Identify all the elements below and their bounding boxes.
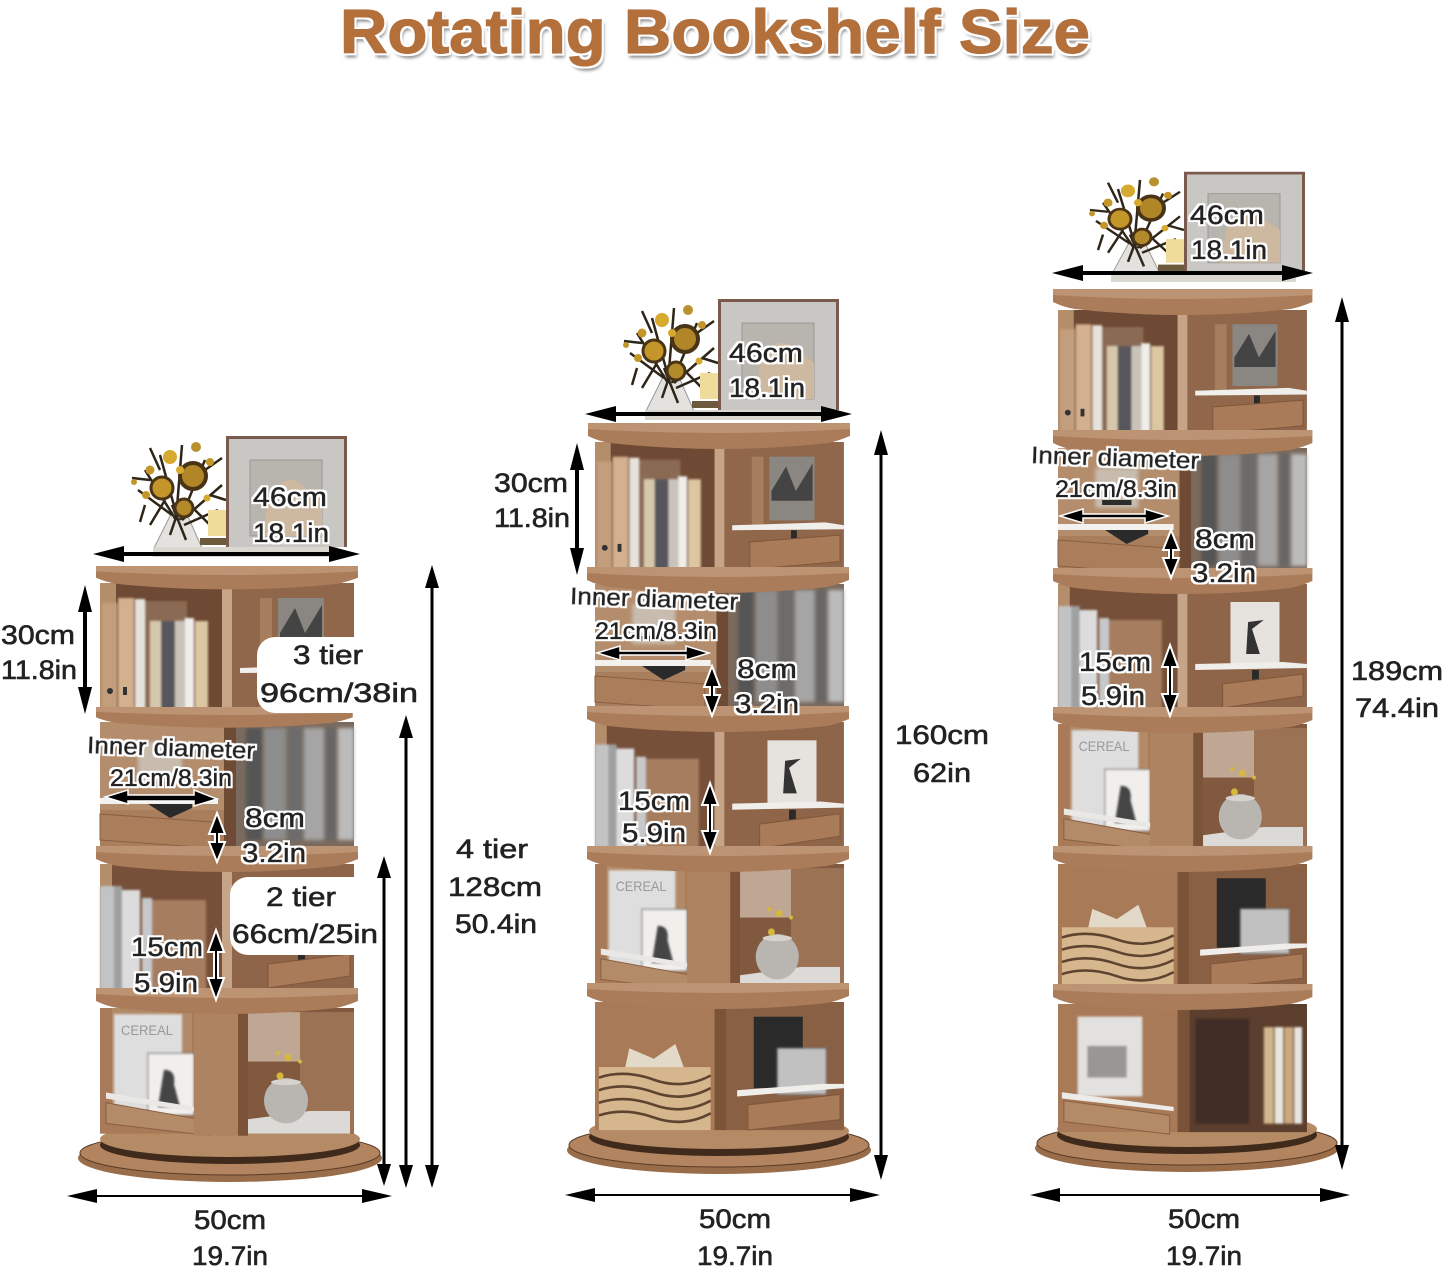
- shelf plate: [587, 983, 849, 1009]
- arrow: inner diameter shelf 3: [1060, 509, 1168, 523]
- bookshelf: 5 tier: [567, 299, 871, 1174]
- labels: 6 tier shelf: 189cm: [1351, 656, 1443, 686]
- arrow: 50cm shelf 2: [565, 1188, 880, 1202]
- arrow: 15cm shelf 3: [1162, 645, 1178, 716]
- arrow: 15cm shelf 1: [208, 930, 224, 1000]
- tier 2 of 5: [595, 584, 844, 712]
- tier 1 of 6: [1058, 310, 1307, 434]
- labels: 5 tier shelf: 160cm: [895, 720, 989, 750]
- labels: 6 tier shelf: 8cm: [1195, 524, 1255, 554]
- arrow: tier height shelf 1: [78, 585, 92, 714]
- top plate: [588, 423, 850, 449]
- arrow: inner diameter shelf 2: [597, 646, 709, 660]
- labels: 4 tier shelf: 15cm: [131, 932, 203, 962]
- shelf plate: [1053, 707, 1312, 733]
- callout: 3 tier: 3 tier: [293, 640, 363, 670]
- labels: 5 tier shelf: [494, 338, 989, 1269]
- arrow: top width shelf 3: [1052, 265, 1313, 281]
- arrow: inner diameter shelf 1: [105, 790, 217, 806]
- top decor: 5 tier: [623, 299, 839, 420]
- tier 2 of 4: [100, 722, 354, 850]
- labels: 5 tier shelf: Inner diameter: [570, 583, 738, 616]
- labels: 5 tier shelf: 18.1in: [729, 373, 805, 403]
- top plate: [1053, 289, 1312, 315]
- arrow: 3 tier height: [399, 715, 413, 1188]
- labels: 6 tier shelf: 15cm: [1079, 647, 1151, 677]
- shelf plate: [96, 707, 353, 728]
- arrow: 50cm shelf 3: [1030, 1188, 1350, 1202]
- shelf plate: [587, 567, 849, 593]
- labels: 5 tier shelf: 46cm: [729, 338, 803, 368]
- labels: 4 tier shelf: 128cm: [448, 872, 542, 902]
- callout: 3 tier: 96cm/38in: [260, 678, 418, 708]
- tier 1 of 5: [595, 442, 844, 569]
- top decor: 6 tier: [1089, 172, 1305, 282]
- labels: 6 tier shelf: 21cm/8.3in: [1055, 476, 1177, 503]
- top decor: 4 tier: [131, 436, 347, 557]
- title: Rotating Bookshelf Size: [342, 2, 1092, 71]
- labels: 5 tier shelf: 21cm/8.3in: [595, 618, 717, 645]
- arrow: 4 tier height: [425, 565, 439, 1188]
- labels: 4 tier shelf: [1, 482, 542, 1269]
- labels: 5 tier shelf: 8cm: [737, 654, 797, 684]
- labels: 4 tier shelf: 18.1in: [253, 518, 329, 548]
- tier 1 of 4: [100, 583, 354, 713]
- labels: 4 tier shelf: 50.4in: [455, 909, 537, 939]
- base: 6 tier: [1035, 1111, 1339, 1172]
- labels: 4 tier shelf: 46cm: [253, 482, 327, 512]
- title: Rotating Bookshelf Size: [340, 0, 1090, 67]
- arrow: total height shelf 2: [874, 430, 888, 1180]
- tier 3 of 5: [595, 722, 844, 851]
- labels: 5 tier shelf: 62in: [913, 758, 971, 788]
- shelf plate: [96, 846, 358, 872]
- labels: 5 tier shelf: 3.2in: [735, 689, 799, 719]
- labels: 6 tier shelf: 3.2in: [1192, 558, 1256, 588]
- labels: 4 tier shelf: Inner diameter: [87, 732, 255, 765]
- labels: 5 tier shelf: 5.9in: [622, 818, 686, 848]
- labels: 4 tier shelf: 3.2in: [242, 838, 306, 868]
- top plate: [96, 566, 358, 589]
- bookshelf: 6 tier: [1035, 172, 1339, 1172]
- shelf plate: [587, 846, 849, 872]
- shelf plate: [1053, 430, 1312, 456]
- arrow: 2 tier height: [377, 856, 391, 1186]
- arrow: 8cm shelf 2: [704, 666, 720, 716]
- arrow: 8cm shelf 1: [209, 813, 225, 862]
- tier 3 of 6: [1058, 584, 1307, 710]
- labels: 4 tier shelf: 50cm: [194, 1205, 266, 1235]
- labels: 6 tier shelf: 18.1in: [1191, 235, 1267, 265]
- labels: 5 tier shelf: 50cm: [699, 1204, 771, 1234]
- arrow: 50cm shelf 1: [67, 1189, 392, 1203]
- tier 5 of 5: [595, 1002, 844, 1130]
- labels: 6 tier shelf: 50cm: [1168, 1204, 1240, 1234]
- tier 4 of 5: [595, 864, 844, 992]
- arrow: 15cm shelf 2: [702, 783, 718, 853]
- shelf plate: [587, 706, 849, 732]
- labels: 6 tier shelf: [1031, 200, 1443, 1269]
- labels: 5 tier shelf: 11.8in: [494, 503, 570, 533]
- arrows: [67, 265, 1350, 1203]
- tier 2 of 6: [1058, 448, 1307, 576]
- arrow: top width shelf 2: [585, 406, 852, 422]
- tier 4 of 4: [100, 1008, 354, 1136]
- callout: 2 tier: 66cm/25in: [232, 919, 378, 949]
- labels: 4 tier shelf: 11.8in: [1, 655, 77, 685]
- arrow: 8cm shelf 3: [1163, 530, 1179, 578]
- tier 6 of 6: [1058, 1004, 1307, 1134]
- arrow: total height shelf 3: [1335, 297, 1349, 1170]
- tier 3 of 4: [100, 864, 354, 990]
- labels: 4 tier shelf: 8cm: [245, 803, 305, 833]
- labels: 4 tier shelf: 4 tier: [456, 834, 528, 864]
- labels: 5 tier shelf: 15cm: [618, 786, 690, 816]
- base: 4 tier: [78, 1121, 382, 1182]
- labels: 6 tier shelf: 74.4in: [1355, 693, 1439, 723]
- labels: 4 tier shelf: 30cm: [1, 620, 75, 650]
- labels: 6 tier shelf: Inner diameter: [1031, 442, 1199, 475]
- tier 4 of 6: [1058, 724, 1307, 852]
- bookshelf: 4 tier: [78, 436, 382, 1182]
- labels: 4 tier shelf: 21cm/8.3in: [110, 765, 232, 792]
- shelf plate: [1053, 846, 1312, 872]
- shelf plate: [1053, 568, 1312, 594]
- arrow: tier height shelf 2: [570, 443, 584, 575]
- labels: 6 tier shelf: 46cm: [1190, 200, 1264, 230]
- arrow: top width shelf 1: [93, 546, 360, 562]
- shelf plate: [96, 988, 358, 1014]
- tier 5 of 6: [1058, 864, 1307, 988]
- shelf plate: [1053, 984, 1312, 1010]
- callout: 2 tier: 2 tier: [266, 882, 336, 912]
- labels: 4 tier shelf: 5.9in: [134, 968, 198, 998]
- callout: 3 tier: [257, 637, 418, 713]
- labels: 5 tier shelf: 30cm: [494, 468, 568, 498]
- callout: 2 tier: [230, 877, 380, 955]
- labels: 6 tier shelf: 5.9in: [1081, 681, 1145, 711]
- base: 5 tier: [567, 1113, 871, 1174]
